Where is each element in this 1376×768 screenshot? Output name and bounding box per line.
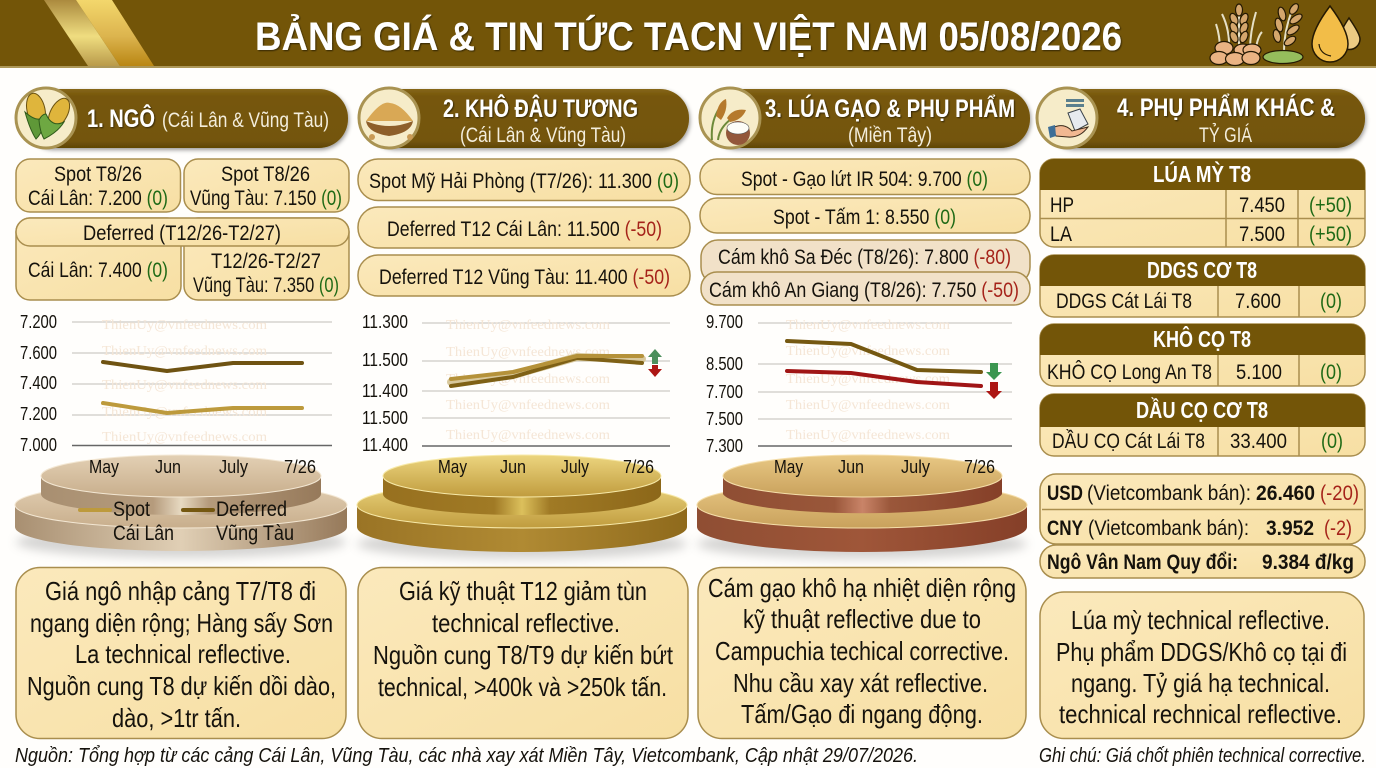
line chart: khô đậu tương: ThienUy@vnfeednews.com	[446, 345, 610, 360]
table: lúa mỳ: (+50)	[1309, 194, 1352, 217]
footer source note: Nguồn: Tổng hợp từ các cảng Cái Lân, Vũng Tàu, các nhà xay xát Miền Tây, Vietcombank, Cập nhật 29/07/2026.	[15, 745, 918, 767]
heading pill: phụ phẩm: 4. PHỤ PHẨM KHÁC &	[1117, 93, 1335, 122]
exchange rates: usd cny: (-20)	[1320, 482, 1359, 505]
podium: ngô with legend: Jun	[155, 456, 181, 477]
commentary: lúa gạo: kỹ thuật reflective due to	[743, 604, 981, 634]
commentary: lúa gạo	[698, 568, 1026, 738]
table: lúa mỳ: LÚA MỲ T8	[1153, 160, 1251, 187]
heading pill: phụ phẩm: TỶ GIÁ	[1199, 124, 1252, 147]
icon: rice and bowl	[700, 88, 760, 148]
table: khô cọ: KHÔ CỌ T8	[1153, 325, 1251, 352]
table: lúa mỳ: 7.500	[1239, 223, 1285, 246]
spot box: cái lân: Spot T8/26	[54, 163, 142, 186]
heading pill: lúa gạo: 3. LÚA GẠO & PHỤ PHẨM	[765, 93, 1015, 123]
table: lúa mỳ: 7.450	[1239, 194, 1285, 217]
table: lúa mỳ: LA	[1050, 223, 1072, 246]
heading pill: khô đậu tương: 2. KHÔ ĐẬU TƯƠNG	[443, 93, 638, 123]
icon: soybean meal bowl	[359, 88, 419, 148]
podium: lúa gạo: Jun	[838, 456, 864, 477]
spot box: hải phòng: Spot Mỹ Hải Phòng (T7/26): 11.300 (0)	[369, 170, 679, 193]
panel: 2 khô đậu tương	[357, 88, 690, 738]
line chart: lúa gạo: 7.700	[706, 381, 743, 402]
commentary: phụ phẩm: Lúa mỳ technical reflective.	[1071, 605, 1330, 635]
line chart: khô đậu tương	[362, 311, 670, 455]
commentary: khô đậu tương: technical reflective.	[432, 608, 620, 638]
table: ddgs: 7.600	[1235, 290, 1281, 313]
deferred box: Deferred (T12/26-T2/27)	[83, 222, 281, 245]
table: lúa mỳ: (+50)	[1309, 223, 1352, 246]
line chart: khô đậu tương: ThienUy@vnfeednews.com	[446, 318, 610, 333]
line chart: khô đậu tương: 11.300	[362, 311, 408, 332]
podium: ngô with legend: 7/26	[284, 456, 316, 477]
table: ddgs	[1040, 255, 1365, 317]
line chart: ngô: 7.200	[20, 403, 57, 424]
line chart: ngô: ThienUy@vnfeednews.com	[102, 430, 267, 445]
bran box: sa đéc: Cám khô Sa Đéc (T8/26): 7.800 (-80)	[718, 246, 1011, 269]
table: dầu cọ: DẦU CỌ Cát Lái T8	[1052, 430, 1205, 453]
icon: green down arrow	[986, 363, 1002, 380]
podium: lúa gạo: May	[774, 456, 804, 477]
deferred box: Cái Lân: 7.400 (0)	[28, 259, 168, 282]
commentary: phụ phẩm	[1040, 592, 1364, 738]
commentary: ngô	[16, 568, 346, 738]
heading pill: ngô: 1. NGÔ	[87, 103, 155, 133]
line chart: khô đậu tương: ThienUy@vnfeednews.com	[446, 428, 610, 443]
line chart: lúa gạo: 9.700	[706, 311, 743, 332]
panel: 4 phụ phẩm khác và tỷ giá	[1037, 88, 1365, 738]
podium: lúa gạo: July	[901, 456, 931, 477]
line chart: khô đậu tương: 11.400	[362, 434, 408, 455]
commentary: khô đậu tương: Nguồn cung T8/T9 dự kiến bứt	[373, 640, 674, 670]
title: BẢNG GIÁ & TIN TỨC TACN VIỆT NAM 05/08/2026	[255, 13, 1122, 59]
spot box: vũng tàu: Vũng Tàu: 7.150 (0)	[190, 187, 342, 210]
commentary: ngô: Nguồn cung T8 dự kiến dồi dào,	[27, 671, 336, 701]
chart legend	[80, 498, 294, 545]
deferred box: Vũng Tàu: 7.350 (0)	[193, 274, 339, 297]
line chart: ngô: ThienUy@vnfeednews.com	[102, 318, 267, 333]
conversion: ngô vân nam	[1040, 545, 1365, 578]
heading pill: ngô: (Cái Lân & Vũng Tàu)	[162, 109, 329, 132]
commentary: lúa gạo: Campuchia techical corrective.	[715, 636, 1009, 666]
spot box: vũng tàu: Spot T8/26	[221, 163, 310, 186]
icon: wheat and leaf	[1263, 2, 1304, 63]
line chart: khô đậu tương: ThienUy@vnfeednews.com	[446, 372, 610, 387]
icon: hand with feed	[1037, 88, 1097, 148]
commentary: khô đậu tương: Giá kỹ thuật T12 giảm tùn	[399, 576, 647, 606]
exchange rates: usd cny: (Vietcombank bán):	[1087, 482, 1251, 505]
spot box: cái lân	[16, 159, 180, 212]
bran box: an giang: Cám khô An Giang (T8/26): 7.750 (-50)	[709, 279, 1019, 302]
commentary: lúa gạo: Tấm/Gạo đi ngang động.	[741, 699, 983, 729]
spot box: gạo lứt: Spot - Gạo lứt IR 504: 9.700 (0)	[741, 168, 988, 191]
spot box: hải phòng	[358, 159, 690, 200]
icon: corn	[16, 88, 76, 148]
panel: 3 lúa gạo	[697, 88, 1030, 738]
line chart: lúa gạo: 8.500	[706, 353, 743, 374]
table: lúa mỳ	[1040, 159, 1365, 247]
icon: wheat and beans	[1210, 4, 1262, 66]
line chart: lúa gạo: 7.500	[706, 408, 743, 429]
commentary: khô đậu tương	[358, 568, 688, 738]
podium: ngô with legend: May	[89, 456, 120, 477]
line chart: khô đậu tương: ThienUy@vnfeednews.com	[446, 398, 610, 413]
exchange rates: usd cny	[1040, 474, 1365, 544]
deferred box: vũng tàu: Deferred T12 Vũng Tàu: 11.400 (-50)	[379, 266, 670, 289]
exchange rates: usd cny: 3.952	[1266, 517, 1314, 540]
table: khô cọ	[1040, 324, 1365, 386]
spot box: gạo lứt	[700, 159, 1030, 194]
spot box: tấm: Spot - Tấm 1: 8.550 (0)	[773, 206, 956, 229]
table: dầu cọ: 33.400	[1230, 430, 1287, 453]
line chart: khô đậu tương: 11.400	[362, 380, 408, 401]
line chart: ngô: ThienUy@vnfeednews.com	[102, 344, 267, 359]
podium: khô đậu tương: 7/26	[623, 456, 654, 477]
commentary: khô đậu tương: technical, >400k và >250k tấn.	[378, 672, 667, 702]
commentary: ngô: ngang diện rộng; Hàng sấy Sơn	[30, 608, 333, 638]
podium: khô đậu tương	[357, 455, 687, 559]
table: khô cọ: KHÔ CỌ Long An T8	[1047, 361, 1212, 384]
line chart: lúa gạo: 7.300	[706, 435, 743, 456]
podium: khô đậu tương: Jun	[500, 456, 526, 477]
table: khô cọ: 5.100	[1236, 361, 1282, 384]
chart legend: Cái Lân	[113, 522, 174, 545]
line chart: ngô: 7.200	[20, 311, 57, 332]
line chart: lúa gạo: ThienUy@vnfeednews.com	[786, 398, 950, 413]
deferred box: vũng tàu	[358, 255, 690, 296]
spot box: tấm	[700, 198, 1030, 233]
heading pill: lúa gạo	[708, 89, 1030, 148]
heading pill: khô đậu tương	[366, 89, 689, 148]
podium: khô đậu tương: May	[438, 456, 468, 477]
heading pill: lúa gạo: (Miền Tây)	[848, 124, 932, 147]
table: khô cọ: (0)	[1320, 361, 1342, 384]
icon: oil drops	[1312, 6, 1360, 62]
table: dầu cọ: DẦU CỌ CƠ T8	[1136, 396, 1268, 423]
chart legend: Spot	[113, 498, 150, 521]
heading pill: ngô	[24, 89, 348, 148]
conversion: ngô vân nam: Ngô Vân Nam Quy đổi:	[1047, 551, 1238, 574]
spot box: cái lân: Cái Lân: 7.200 (0)	[28, 187, 168, 210]
podium: khô đậu tương: July	[561, 456, 590, 477]
commentary: phụ phẩm: ngang. Tỷ giá hạ technical.	[1071, 668, 1330, 698]
table: ddgs: (0)	[1320, 290, 1342, 313]
podium: lúa gạo	[697, 455, 1027, 559]
commentary: lúa gạo: Cám gạo khô hạ nhiệt diện rộng	[708, 573, 1016, 603]
chart legend: Vũng Tàu	[216, 522, 294, 545]
table: ddgs: DDGS Cát Lái T8	[1056, 290, 1192, 313]
line chart: ngô: 7.000	[20, 434, 57, 455]
line chart: ngô: 7.400	[20, 372, 57, 393]
heading pill: phụ phẩm	[1045, 89, 1365, 148]
line chart: khô đậu tương: 11.500	[362, 349, 408, 370]
line chart: ngô	[20, 311, 332, 455]
chart legend: Deferred	[216, 498, 287, 521]
line chart: lúa gạo: ThienUy@vnfeednews.com	[786, 344, 950, 359]
line chart: khô đậu tương: 11.500	[362, 407, 408, 428]
exchange rates: usd cny: USD	[1047, 482, 1083, 505]
bran box: sa đéc	[701, 240, 1030, 284]
panel: 1 ngô	[15, 88, 349, 738]
podium: lúa gạo: 7/26	[964, 456, 995, 477]
table: dầu cọ: (0)	[1321, 430, 1343, 453]
icon: down arrow	[648, 365, 662, 377]
line chart: ngô: ThienUy@vnfeednews.com	[102, 405, 267, 420]
exchange rates: usd cny: (-2)	[1324, 517, 1352, 540]
deferred box	[16, 218, 349, 300]
table: dầu cọ	[1040, 394, 1365, 456]
deferred box: T12/26-T2/27	[211, 250, 321, 273]
header band	[0, 0, 1376, 68]
deferred box: cái lân: Deferred T12 Cái Lân: 11.500 (-50)	[387, 218, 662, 241]
table: lúa mỳ: HP	[1050, 194, 1074, 217]
table: ddgs: DDGS CƠ T8	[1147, 257, 1257, 283]
line chart: lúa gạo: ThienUy@vnfeednews.com	[786, 372, 950, 387]
podium: ngô with legend	[15, 455, 347, 558]
exchange rates: usd cny: 26.460	[1256, 482, 1315, 505]
line chart: lúa gạo: ThienUy@vnfeednews.com	[786, 428, 950, 443]
icon: red down arrow	[986, 382, 1002, 399]
exchange rates: usd cny: CNY	[1047, 517, 1083, 540]
bran box: an giang	[701, 272, 1030, 305]
line chart: lúa gạo	[706, 311, 1012, 456]
commentary: ngô: Giá ngô nhập cảng T7/T8 đi	[45, 576, 316, 606]
icon: up arrow	[648, 349, 662, 364]
heading pill: khô đậu tương: (Cái Lân & Vũng Tàu)	[460, 124, 626, 147]
commentary: ngô: La technical reflective.	[75, 639, 291, 669]
podium: ngô with legend: July	[219, 456, 249, 477]
commentary: lúa gạo: Nhu cầu xay xát reflective.	[733, 668, 988, 698]
deferred box: cái lân	[358, 207, 690, 248]
conversion: ngô vân nam: 9.384 đ/kg	[1262, 551, 1354, 574]
commentary: ngô: dào, >1tr tấn.	[112, 703, 241, 733]
spot box: vũng tàu	[184, 159, 349, 212]
line chart: ngô: ThienUy@vnfeednews.com	[102, 378, 267, 393]
exchange rates: usd cny: (Vietcombank bán):	[1088, 517, 1249, 540]
line chart: ngô: 7.600	[20, 342, 57, 363]
line chart: lúa gạo: ThienUy@vnfeednews.com	[786, 318, 950, 333]
